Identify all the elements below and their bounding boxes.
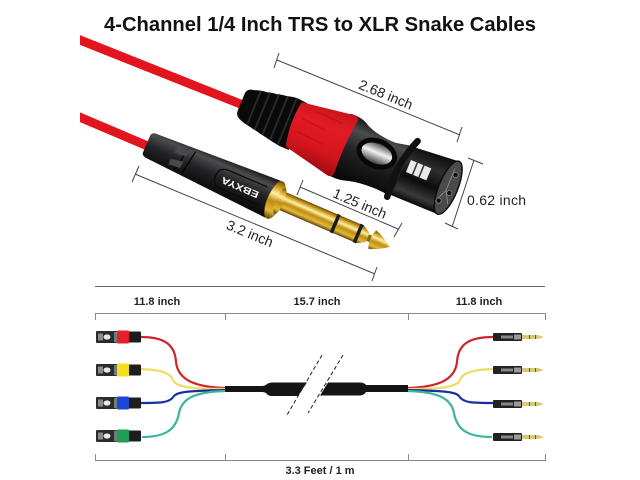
left fan-out cables xyxy=(141,337,225,437)
label: left 11.8 inch: 11.8 inch xyxy=(134,296,181,308)
strain relief xyxy=(231,79,308,150)
right fan-out cables xyxy=(408,337,493,437)
divider line xyxy=(95,286,545,288)
red shell xyxy=(278,94,359,178)
cable break mark, dashed lines xyxy=(287,355,343,415)
dimension: 1.25 inch: 1.25 inch xyxy=(331,185,389,222)
gold ring xyxy=(260,179,291,222)
bottom length bracket xyxy=(96,454,546,460)
title: 4-Channel 1/4 Inch TRS to XLR Snake Cables xyxy=(104,13,536,36)
dimension: 0.62 inch xyxy=(445,158,526,229)
snake main cable, right section xyxy=(320,382,408,396)
dimension: 1.25 inch xyxy=(297,180,402,237)
lower red cable for TRS connector xyxy=(70,113,150,147)
dimension: 2.68 inch xyxy=(274,53,462,142)
TRS plug: green channel xyxy=(493,433,544,441)
label: right 11.8 inch: 11.8 inch xyxy=(456,296,503,308)
latch window xyxy=(406,160,431,180)
TRS plug: red channel xyxy=(493,333,544,341)
latch button xyxy=(352,132,402,175)
TRS plug: yellow channel xyxy=(493,366,544,374)
upper red cable for XLR connector xyxy=(70,36,243,105)
label: total length: 3.3 Feet / 1 m xyxy=(285,465,355,477)
shaft xyxy=(277,191,394,256)
collar ring xyxy=(386,138,418,199)
label: 15.7 inch: 15.7 inch xyxy=(293,296,341,308)
top length bracket xyxy=(96,314,546,320)
dimension: 2.68 inch: 2.68 inch xyxy=(357,76,415,113)
XLR female connector xyxy=(228,73,469,223)
TRS plug: blue channel xyxy=(493,400,544,408)
1/4 inch TRS jack xyxy=(138,126,397,267)
dimension: 3.2 inch xyxy=(132,166,377,281)
left XLR connector: red xyxy=(96,330,141,344)
dimension: 0.62 inch: 0.62 inch xyxy=(467,192,526,208)
left XLR connector: yellow xyxy=(96,364,141,376)
black neck xyxy=(326,114,418,202)
left XLR connector: blue xyxy=(96,396,141,410)
dimension: 3.2 inch: 3.2 inch xyxy=(224,217,276,250)
barrel xyxy=(391,142,459,214)
left XLR connector: green xyxy=(96,430,141,442)
jack body xyxy=(138,126,281,218)
brand label: EBXYA xyxy=(220,174,261,200)
connector face xyxy=(429,158,468,218)
snake main cable, left section xyxy=(225,382,307,396)
